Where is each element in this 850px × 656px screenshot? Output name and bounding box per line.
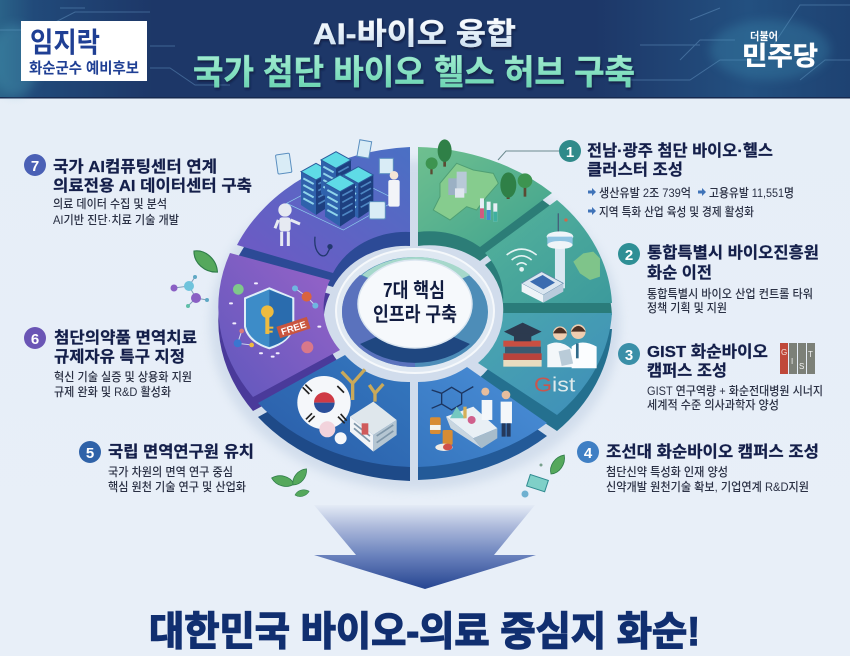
center hub — [336, 249, 494, 373]
candidate name box: 화순군수 예비후보 — [29, 60, 139, 77]
segment 6: immunotherapy free zone — [218, 253, 340, 411]
item 1: 생산유발 2조 739억 — [599, 186, 691, 200]
item 4: 4 — [584, 445, 593, 462]
segment 3: GIST campus: Gist — [534, 374, 576, 397]
item 7: 국가 AI컴퓨팅센터 연계 — [53, 158, 217, 176]
item 2: 화순 이전 — [647, 264, 712, 282]
item 7 — [24, 154, 252, 227]
GIST logo: T — [808, 350, 813, 359]
item 4 — [577, 441, 819, 494]
GIST logo — [780, 343, 815, 374]
item 6: 규제자유 특구 지정 — [54, 348, 185, 366]
segment 7: AI data center — [237, 140, 410, 287]
hub label: 7대 핵심 — [383, 279, 445, 302]
item 1: 전남·광주 첨단 바이오·헬스 — [587, 142, 773, 160]
title: 국가 첨단 바이오 헬스 허브 구축 — [193, 54, 635, 92]
item 2: 정책 기획 및 지원 — [647, 300, 727, 315]
decoration: right leaf and capsule — [522, 452, 568, 498]
item 6: 혁신 기술 실증 및 상용화 지원 — [54, 369, 192, 384]
item 6: 규제 완화 및 R&D 활성화 — [54, 385, 171, 399]
decoration: left leaves — [270, 466, 310, 498]
item 6: 첨단의약품 면역치료 — [54, 329, 197, 347]
bottom slogan: 대한민국 바이오-의료 중심지 화순! — [149, 610, 700, 654]
item 3 — [618, 343, 823, 412]
item 1: 지역 특화 산업 육성 및 경제 활성화 — [599, 205, 754, 219]
item 1: 1 — [566, 144, 574, 161]
item 3: 캠퍼스 조성 — [647, 362, 727, 380]
hub label: 인프라 구축 — [373, 303, 457, 326]
item 3: 세계적 수준 의사과학자 양성 — [647, 397, 779, 412]
item 5: 국립 면역연구원 유치 — [108, 443, 254, 461]
GIST logo: G — [781, 348, 787, 357]
item 6: 6 — [31, 331, 39, 348]
item 2 — [618, 243, 819, 315]
GIST logo: S — [799, 362, 804, 371]
segment 5: immunology institute — [258, 355, 410, 481]
item 5 — [79, 441, 254, 494]
candidate name box: 임지락 — [30, 27, 100, 58]
segment 6: immunotherapy free zone: FREE — [280, 319, 308, 337]
segment 4: Chosun University campus — [418, 367, 547, 480]
party logo — [742, 30, 818, 71]
item 4: 첨단신약 특성화 인재 양성 — [606, 464, 728, 479]
item 3: GIST 연구역량 + 화순전대병원 시너지 — [647, 383, 823, 398]
item 2: 2 — [625, 247, 633, 264]
item 7: 의료 데이터 수집 및 분석 — [53, 197, 167, 211]
item 3: GIST 화순바이오 — [647, 343, 768, 361]
segment 3: GIST campus — [478, 313, 612, 431]
segment 2: bio promotion institute — [485, 200, 612, 315]
party logo: 민주당 — [742, 41, 818, 71]
item 4: 조선대 화순바이오 캠퍼스 조성 — [606, 443, 819, 461]
hub label — [373, 279, 457, 326]
item 1: 고용유발 11,551명 — [709, 186, 794, 200]
item 7: 의료전용 AI 데이터센터 구축 — [53, 177, 252, 195]
big down arrow — [314, 505, 536, 589]
item 5: 5 — [86, 445, 94, 462]
item 2: 통합특별시 바이오진흥원 — [647, 244, 819, 262]
item 5: 핵심 원천 기술 연구 및 산업화 — [108, 479, 246, 494]
item 1 — [559, 140, 794, 219]
segment 1: regional cluster — [418, 139, 552, 261]
decoration: molecule and leaf — [170, 246, 222, 308]
item 1: 클러스터 조성 — [587, 161, 683, 179]
item 2: 통합특별시 바이오 산업 컨트롤 타워 — [647, 286, 813, 301]
GIST logo: I — [791, 357, 793, 366]
item 3: 3 — [625, 347, 633, 364]
item 6 — [24, 327, 197, 399]
party logo: 더불어 — [750, 30, 778, 43]
item 5: 국가 차원의 면역 연구 중심 — [108, 465, 233, 479]
wheel diagram — [210, 139, 620, 490]
item 4: 신약개발 원천기술 확보, 기업연계 R&D지원 — [606, 479, 809, 494]
header banner — [0, 0, 850, 98]
item 7: AI기반 진단·치료 기술 개발 — [53, 213, 179, 227]
candidate name box — [21, 21, 147, 81]
title: AI-바이오 융합 — [313, 18, 516, 51]
callout line 1 — [498, 151, 559, 160]
item 7: 7 — [31, 158, 39, 175]
title — [193, 18, 635, 92]
